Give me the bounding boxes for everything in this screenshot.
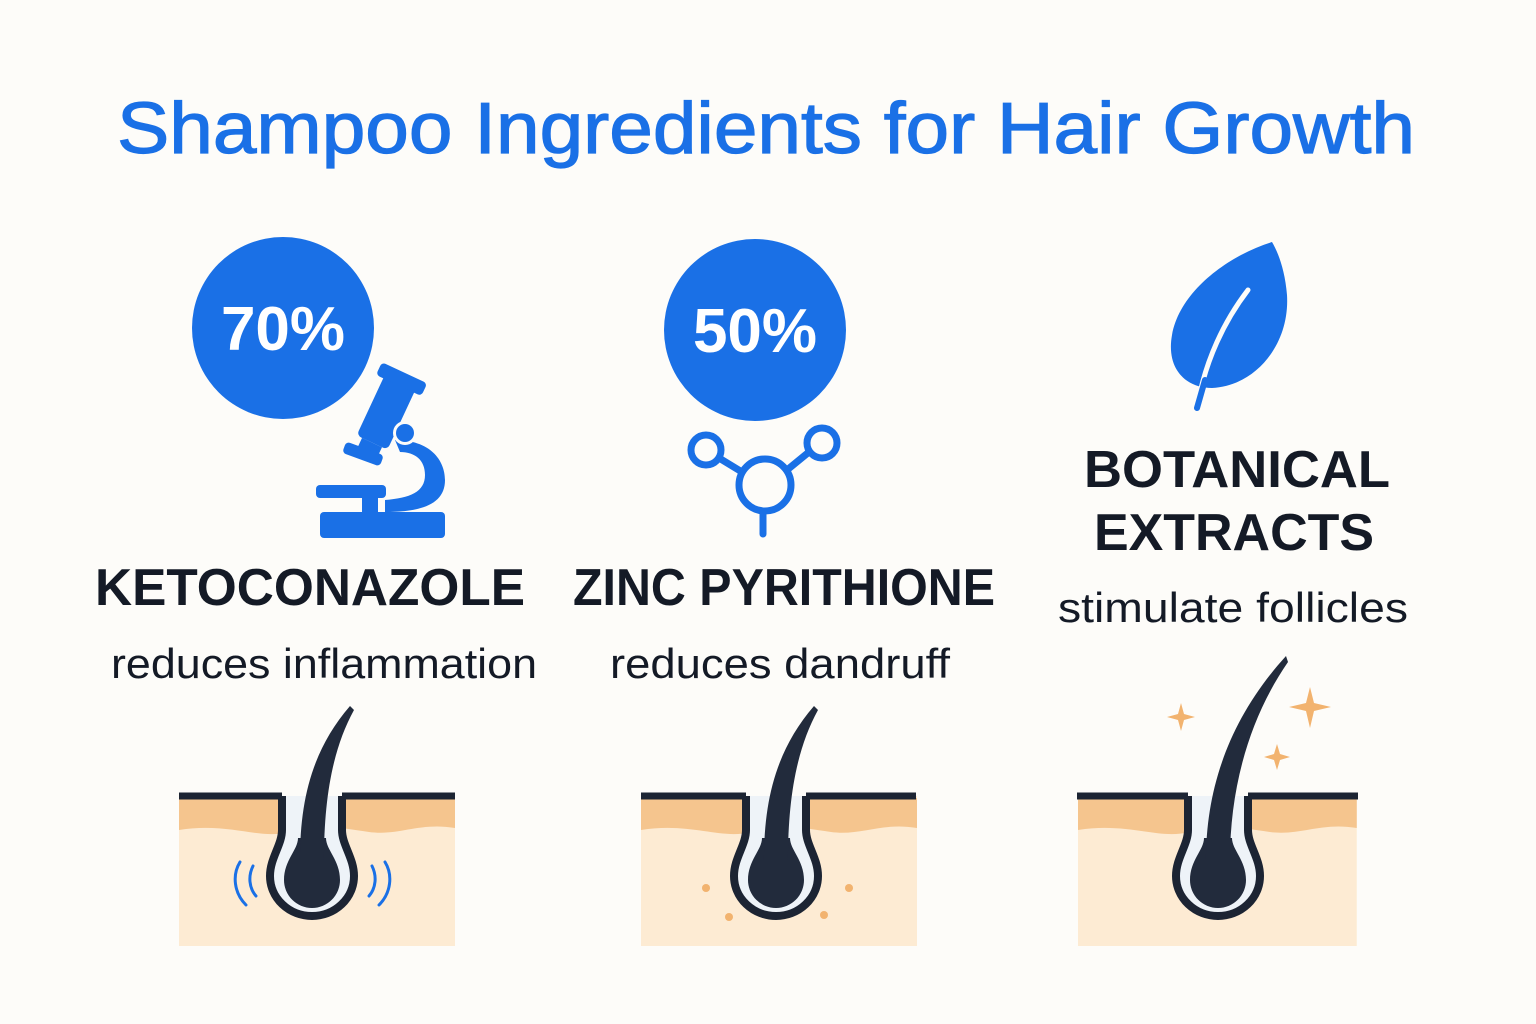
icon: leaf <box>1171 242 1287 408</box>
panel: zinc pyrithione <box>573 239 995 946</box>
panel: botanical extracts <box>1058 242 1408 946</box>
panel: botanical extracts: EXTRACTS <box>1094 504 1374 562</box>
badge: 50% <box>664 239 846 421</box>
icon: molecule <box>691 428 837 534</box>
badge: 70%: 70% <box>221 295 345 364</box>
heading: botanical extracts: BOTANICAL <box>1084 441 1390 499</box>
heading: ketoconazole: KETOCONAZOLE <box>95 559 525 617</box>
illustration: stimulated follicle <box>1077 656 1358 946</box>
heading: zinc pyrithione: ZINC PYRITHIONE <box>573 559 995 617</box>
title: Shampoo Ingredients for Hair Growth <box>117 89 1415 169</box>
badge: 70% <box>192 237 374 419</box>
illustration: follicle with inflammation <box>179 706 455 946</box>
illustration: follicle with dandruff <box>641 706 917 946</box>
text: stimulate follicles: stimulate follicles <box>1058 584 1408 631</box>
text: reduces dandruff: reduces dandruff <box>610 640 950 687</box>
text: reduces inflammation: reduces inflammation <box>111 640 537 687</box>
icon: microscope <box>316 362 445 538</box>
badge: 50%: 50% <box>693 297 817 366</box>
panel: ketoconazole <box>95 237 537 946</box>
